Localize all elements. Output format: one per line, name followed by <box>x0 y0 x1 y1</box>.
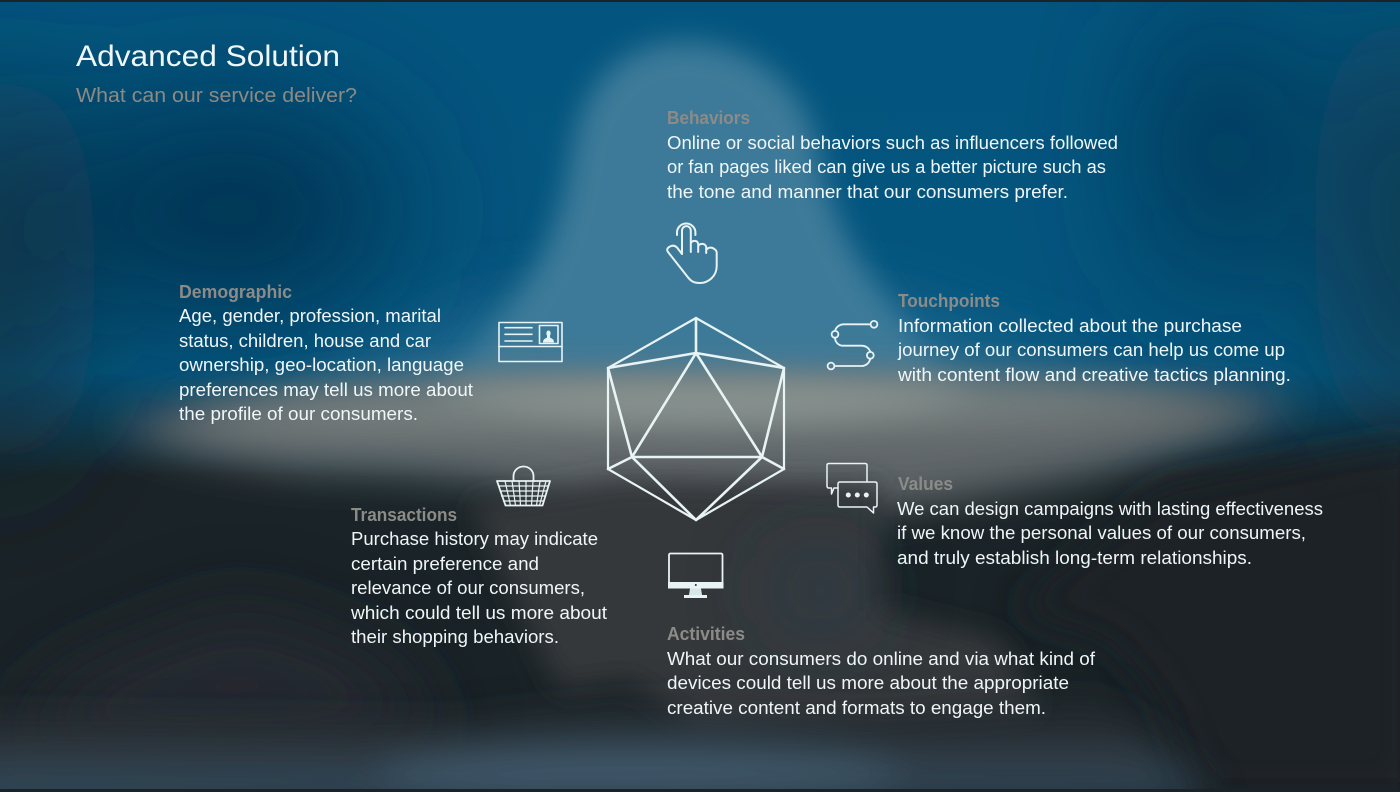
background band <box>115 383 1295 512</box>
panel: transactions <box>350 505 607 647</box>
description: touchpoints <box>897 316 1291 385</box>
description: demographic: status, children, house and car <box>179 331 431 351</box>
description: behaviors: Online or social behaviors such as influencers followed <box>667 133 1118 153</box>
icon: journey path <box>828 321 877 369</box>
description: transactions: which could tell us more about <box>350 603 607 623</box>
description: transactions: certain preference and <box>351 554 539 574</box>
description: behaviors <box>667 133 1118 202</box>
description: behaviors: the tone and manner that our consumers prefer. <box>667 182 1068 202</box>
description: touchpoints: journey of our consumers can help us come up <box>897 340 1285 360</box>
description: behaviors: or fan pages liked can give us a better picture such as <box>667 157 1106 177</box>
description: activities: creative content and formats to engage them. <box>667 698 1046 718</box>
description: demographic: ownership, geo-location, language <box>179 355 464 375</box>
subtitle: What can our service deliver? <box>76 85 357 107</box>
description: values: and truly establish long-term relationships. <box>897 548 1252 568</box>
heading: activities: Activities <box>667 624 745 644</box>
background glow dome <box>440 42 960 400</box>
description: touchpoints: with content flow and creative tactics planning. <box>897 365 1291 385</box>
icon: desktop monitor <box>668 554 724 598</box>
description: values <box>897 499 1323 568</box>
panel: touchpoints <box>897 291 1291 385</box>
description: values: if we know the personal values of our consumers, <box>897 523 1306 543</box>
description: values: We can design campaigns with lasting effectiveness <box>897 499 1323 519</box>
description: activities <box>667 649 1096 718</box>
description: touchpoints: Information collected about the purchase <box>898 316 1242 336</box>
icon: pointing hand <box>667 224 717 283</box>
panel: demographic <box>179 282 473 424</box>
icon: speech bubbles <box>827 464 877 513</box>
heading: values: Values <box>898 474 953 494</box>
icon: id card <box>499 322 562 362</box>
description: demographic: the profile of our consumers. <box>179 404 418 424</box>
description: transactions: Purchase history may indicate <box>351 529 598 549</box>
description: activities: devices could tell us more about the appropriate <box>667 673 1069 693</box>
heading: touchpoints: Touchpoints <box>898 291 1000 311</box>
heading: demographic: Demographic <box>179 282 292 302</box>
description: demographic: preferences may tell us more about <box>179 380 473 400</box>
description: demographic: Age, gender, profession, marital <box>179 306 441 326</box>
panel: behaviors <box>667 108 1118 202</box>
title: Advanced Solution <box>76 40 340 73</box>
description: transactions <box>350 529 607 647</box>
description: transactions: relevance of our consumers, <box>351 578 585 598</box>
heading: transactions: Transactions <box>351 505 457 525</box>
description: activities: What our consumers do online and via what kind of <box>667 649 1096 669</box>
icon: shopping basket <box>497 466 550 506</box>
panel: activities <box>667 624 1096 718</box>
description: transactions: their shopping behaviors. <box>351 627 559 647</box>
heading: behaviors: Behaviors <box>667 108 750 128</box>
description: demographic <box>179 306 473 424</box>
panel: values <box>897 474 1323 568</box>
icon: icosahedron <box>608 318 784 520</box>
